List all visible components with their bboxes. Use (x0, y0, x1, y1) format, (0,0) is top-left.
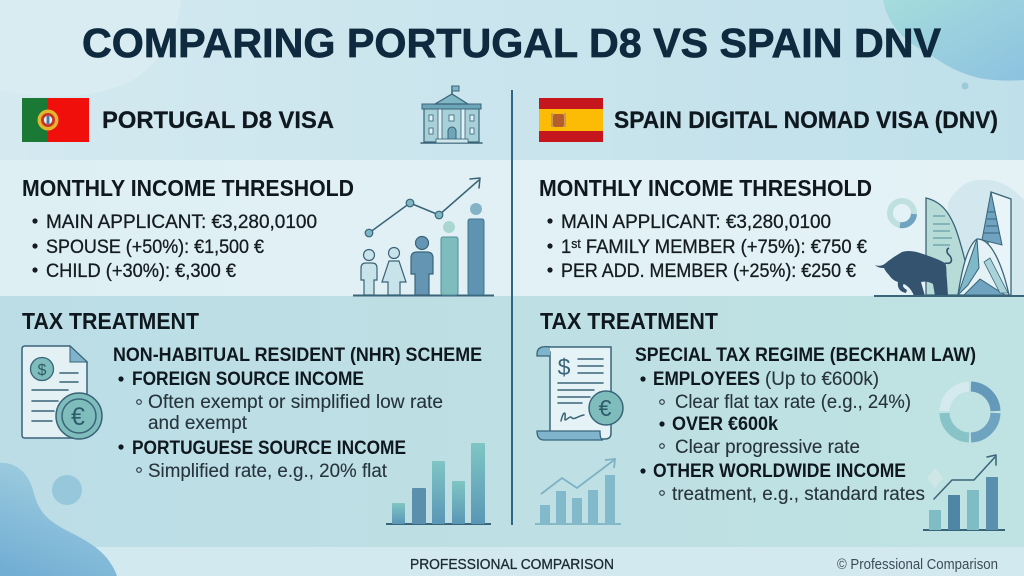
bar with dot: teal (441, 221, 458, 295)
Beckham list (640, 368, 925, 505)
panel: Portugal (22, 86, 494, 524)
income list: 1 (561, 236, 572, 258)
illustration: bull and skyline (874, 180, 1024, 296)
bar with dot: blue (468, 203, 484, 295)
income list: MAIN APPLICANT: €3,280,0100 (561, 211, 831, 233)
Portugal heading: PORTUGAL D8 VISA (102, 107, 334, 134)
bar chart: Portugal tax (386, 443, 491, 524)
decorative blob: bottom left (0, 463, 117, 576)
Beckham list: OVER €600k (672, 413, 778, 435)
income list: SPOUSE (+50%): €1,500 € (46, 236, 264, 258)
Beckham list: EMPLOYEES (653, 368, 760, 390)
income list: PER ADD. MEMBER (+25%): €250 € (561, 260, 856, 282)
NHR list (118, 368, 443, 482)
income list: CHILD (+30%): €,300 € (46, 260, 236, 282)
NHR heading: NON-HABITUAL RESIDENT (NHR) SCHEME (113, 344, 482, 366)
footer (410, 557, 998, 573)
icon: government building (421, 86, 482, 143)
NHR list: PORTUGUESE SOURCE INCOME (132, 437, 406, 459)
icon: tax document (22, 346, 102, 439)
Beckham list: (Up to €600k) (765, 369, 879, 390)
income list (32, 211, 317, 282)
decorative dot (962, 82, 968, 90)
adult figure (411, 236, 433, 295)
bar and line chart: right (923, 455, 1005, 530)
icon: tax document: € (71, 403, 85, 431)
dome tower (958, 239, 1009, 295)
NHR list: Often exempt or simplified low rate (148, 392, 443, 413)
icon: Spain flag (539, 98, 603, 142)
income list (547, 211, 867, 282)
man figure (361, 250, 377, 295)
income list: st (571, 236, 581, 251)
NHR list: FOREIGN SOURCE INCOME (132, 368, 364, 390)
icon: tax scroll (537, 347, 623, 440)
donut chart (944, 386, 996, 438)
Beckham list: Clear progressive rate (675, 437, 860, 458)
donut (890, 201, 914, 225)
decorative blob: top right (883, 0, 1024, 81)
panel: Spain (535, 98, 1024, 530)
Spain heading: SPAIN DIGITAL NOMAD VISA (DNV) (614, 107, 998, 134)
income heading: MONTHLY INCOME THRESHOLD (539, 175, 872, 201)
bull (875, 248, 951, 296)
bar and line chart: left (535, 459, 621, 524)
NHR list: and exempt (148, 413, 248, 434)
sharp tower (982, 192, 1011, 295)
NHR list: Simplified rate, e.g., 20% flat (148, 461, 388, 482)
tax heading: TAX TREATMENT (22, 308, 199, 334)
woman figure (382, 248, 406, 295)
Beckham list: treatment, e.g., standard rates (672, 484, 925, 505)
chart: family growth (353, 178, 494, 296)
title: COMPARING PORTUGAL D8 VS SPAIN DNV (82, 20, 942, 66)
income section: Portugal (22, 175, 494, 296)
Beckham heading: SPECIAL TAX REGIME (BECKHAM LAW) (635, 344, 976, 366)
income section: Spain (539, 175, 1024, 296)
icon: tax scroll: € (599, 395, 612, 421)
footer center label: PROFESSIONAL COMPARISON (410, 557, 614, 573)
income heading: MONTHLY INCOME THRESHOLD (22, 175, 354, 201)
Beckham list: Clear flat tax rate (e.g., 24%) (675, 392, 911, 413)
icon: tax scroll: $ (558, 354, 571, 380)
tax section: Spain (535, 308, 1005, 530)
curved tower (926, 198, 972, 295)
icon: Portugal flag (22, 98, 89, 142)
tax section: Portugal (22, 308, 491, 524)
footer copyright: © Professional Comparison (837, 557, 998, 573)
income list: MAIN APPLICANT: €3,280,0100 (46, 211, 317, 233)
center divider (511, 90, 513, 525)
income list: FAMILY MEMBER (+75%): €750 € (581, 236, 867, 258)
tax heading: TAX TREATMENT (540, 308, 718, 334)
icon: tax document: $ (38, 362, 47, 379)
Beckham list: OTHER WORLDWIDE INCOME (653, 460, 906, 482)
